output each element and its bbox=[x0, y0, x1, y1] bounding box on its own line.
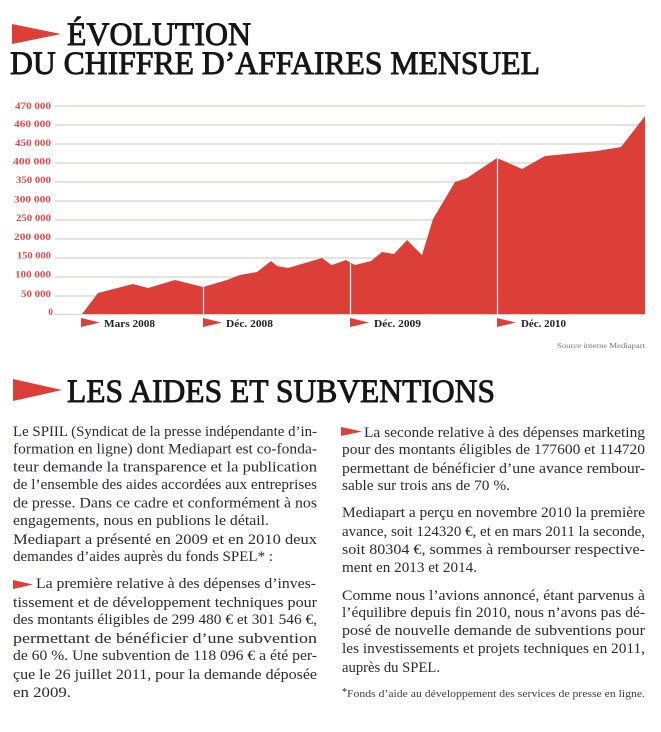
text block: left column: Mediapart a présenté en 2009 et en 2010 deux bbox=[13, 532, 318, 548]
text block: right column: La seconde relative à des dépenses marketing bbox=[364, 425, 646, 441]
year dividers bbox=[204, 143, 498, 314]
text block: right column: Comme nous l’avions annoncé, étant parvenus à bbox=[342, 588, 645, 604]
text block: right column: soit 80304 €, sommes à rembourser respective- bbox=[342, 542, 645, 558]
area chart: monthly revenue bbox=[13, 101, 645, 330]
text block: left column: La première relative à des dépenses d’inves- bbox=[36, 576, 316, 592]
y axis labels: 350 000 bbox=[16, 175, 51, 185]
x axis marker: Déc. 2010: Déc. 2010 bbox=[521, 318, 566, 330]
text block: left column: tissement et de développement techniques pour bbox=[13, 595, 317, 611]
text block: right column: sable sur trois ans de 70 %. bbox=[342, 478, 510, 494]
text block: left column: demandes d’aides auprès du fonds SPEL* : bbox=[13, 549, 273, 565]
x axis marker: Mars 2008 bbox=[81, 318, 156, 330]
y axis labels: 470 000 bbox=[15, 101, 51, 111]
text block: left column: Le SPIIL (Syndicat de la presse indépendante d’in- bbox=[13, 424, 317, 440]
y axis labels: 0 bbox=[48, 307, 53, 317]
y axis labels: 460 000 bbox=[14, 119, 52, 129]
x axis marker: Déc. 2008: Déc. 2008 bbox=[226, 318, 274, 330]
footnote: Fonds d’aide au développement des services de presse en ligne. bbox=[347, 689, 645, 700]
heading: les aides et subventions: LES AIDES ET SUBVENTIONS bbox=[67, 374, 495, 410]
y axis labels: 250 000 bbox=[16, 213, 51, 223]
heading: évolution du chiffre d'affaires mensuel: ÉVOLUTION bbox=[67, 16, 251, 53]
text block: right column: les investissements et projets techniques en 2011, bbox=[342, 641, 645, 657]
text block: left column: permettant de bénéficier d’une subvention bbox=[13, 631, 318, 647]
text block: right column: pour des montants éligibles de 177600 et 114720 bbox=[342, 442, 645, 458]
y axis labels bbox=[13, 101, 53, 317]
text block: right column: ment en 2013 et 2014. bbox=[342, 560, 477, 576]
text block: right column: l’équilibre depuis fin 2010, nous n’avons pas dé- bbox=[342, 605, 645, 621]
x axis marker: Déc. 2009: Déc. 2009 bbox=[374, 318, 422, 330]
text block: left column: teur demande la transparence et la publication bbox=[13, 460, 318, 476]
text block: left column bbox=[13, 424, 318, 701]
icon: title arrow bbox=[12, 24, 61, 44]
y axis labels: 100 000 bbox=[15, 270, 51, 280]
y axis labels: 50 000 bbox=[21, 289, 51, 299]
icon: paragraph arrow bbox=[341, 427, 362, 436]
text block: right column bbox=[341, 425, 646, 676]
heading: évolution du chiffre d'affaires mensuel bbox=[10, 16, 540, 82]
x axis marker: Déc. 2008 bbox=[203, 318, 274, 330]
text block: left column: des montants éligibles de 299 480 € et 301 546 €, bbox=[13, 612, 317, 628]
y axis labels: 450 000 bbox=[15, 138, 51, 148]
x axis marker: Déc. 2010 bbox=[497, 318, 566, 330]
text block: left column: de 60 %. Une subvention de 118 096 € a été per- bbox=[13, 648, 317, 664]
text block: left column: de presse. Dans ce cadre et conformément à nos bbox=[13, 496, 317, 512]
text block: left column: formation en ligne) dont Mediapart est co-fonda- bbox=[13, 442, 317, 458]
y axis labels: 400 000 bbox=[13, 156, 52, 166]
y axis labels: 200 000 bbox=[14, 232, 52, 242]
text block: right column: posé de nouvelle demande de subventions pour bbox=[342, 623, 645, 639]
y axis labels: 300 000 bbox=[14, 194, 52, 204]
text block: left column: engagements, nous en publions le détail. bbox=[13, 513, 269, 529]
text block: left column: en 2009. bbox=[13, 685, 71, 701]
red revenue area bbox=[82, 116, 645, 314]
icon: paragraph arrow bbox=[13, 580, 33, 589]
text block: right column: auprès du SPEL. bbox=[342, 660, 440, 676]
y axis labels: 150 000 bbox=[17, 250, 51, 260]
icon: section arrow bbox=[13, 379, 62, 401]
footnote: * bbox=[342, 687, 347, 698]
text block: left column: de l’ensemble des aides accordées aux entreprises bbox=[13, 477, 317, 493]
x axis marker: Déc. 2009 bbox=[350, 318, 422, 330]
source note: Source interne Mediapart bbox=[557, 341, 646, 350]
text block: right column: avance, soit 124320 €, et en mars 2011 la seconde, bbox=[342, 524, 645, 540]
x axis marker: Mars 2008: Mars 2008 bbox=[104, 318, 156, 330]
text block: right column: Mediapart a perçu en novembre 2010 la première bbox=[342, 505, 645, 521]
text block: right column: permettant de bénéficier d’une avance rembour- bbox=[342, 461, 645, 477]
heading: évolution du chiffre d'affaires mensuel: DU CHIFFRE D’AFFAIRES MENSUEL bbox=[10, 46, 540, 82]
text block: left column: çue le 26 juillet 2011, pour la demande déposée bbox=[13, 667, 317, 683]
